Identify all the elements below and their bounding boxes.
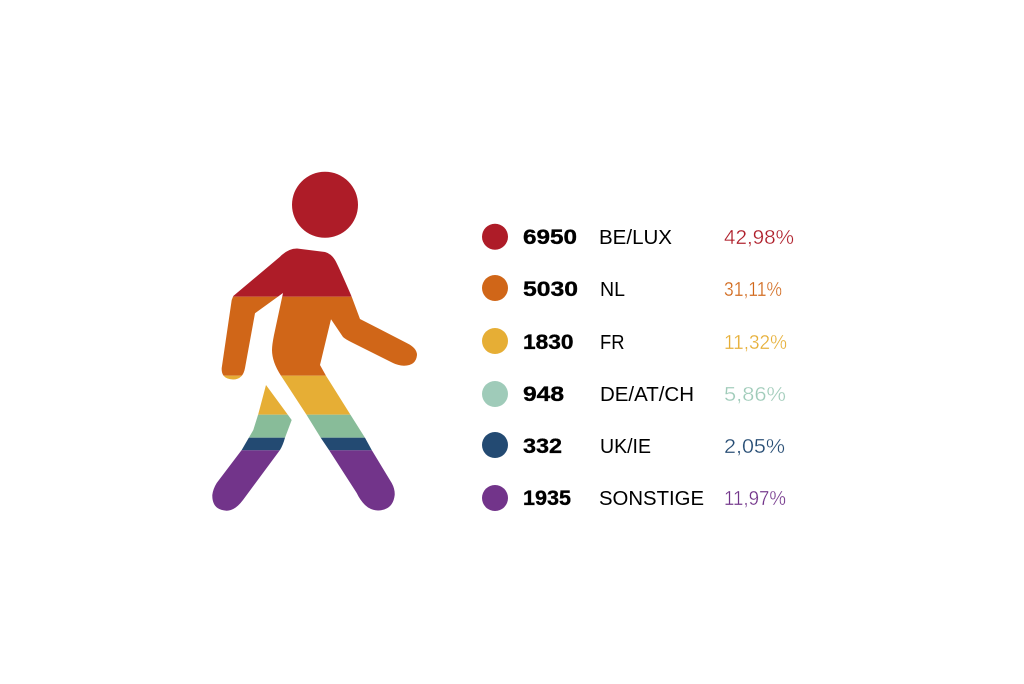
legend row: UK/IE: 332 <box>523 435 562 458</box>
legend row: SONSTIGE: SONSTIGE <box>599 488 704 510</box>
legend row: NL: NL <box>600 279 625 301</box>
legend row: DE/AT/CH: DE/AT/CH <box>600 384 694 406</box>
legend row: DE/AT/CH: 948 <box>523 383 564 406</box>
legend row: DE/AT/CH: 5,86% <box>724 384 786 406</box>
legend row: FR <box>482 328 787 354</box>
legend row: NL <box>482 275 782 301</box>
legend row: SONSTIGE: 11,97% <box>724 488 786 510</box>
legend row: FR: 1830 <box>523 331 574 354</box>
legend row: NL: 31,11% <box>724 279 782 301</box>
legend row: BE/LUX: 6950 <box>523 226 577 249</box>
legend row: BE/LUX: 42,98% <box>724 227 794 249</box>
legend row: BE/LUX <box>482 224 794 250</box>
legend row: FR: FR <box>600 332 624 354</box>
walking figure with coloured bands <box>212 172 417 511</box>
legend row: NL: 5030 <box>523 278 578 301</box>
legend row: DE/AT/CH <box>482 381 786 407</box>
legend row: FR: 11,32% <box>724 332 787 354</box>
legend row: UK/IE: UK/IE <box>600 436 651 458</box>
legend row: SONSTIGE: 1935 <box>523 487 571 510</box>
legend row: BE/LUX: BE/LUX <box>599 227 672 249</box>
legend row: UK/IE: 2,05% <box>724 436 785 458</box>
legend row: UK/IE <box>482 432 785 458</box>
legend row: SONSTIGE <box>482 485 786 511</box>
